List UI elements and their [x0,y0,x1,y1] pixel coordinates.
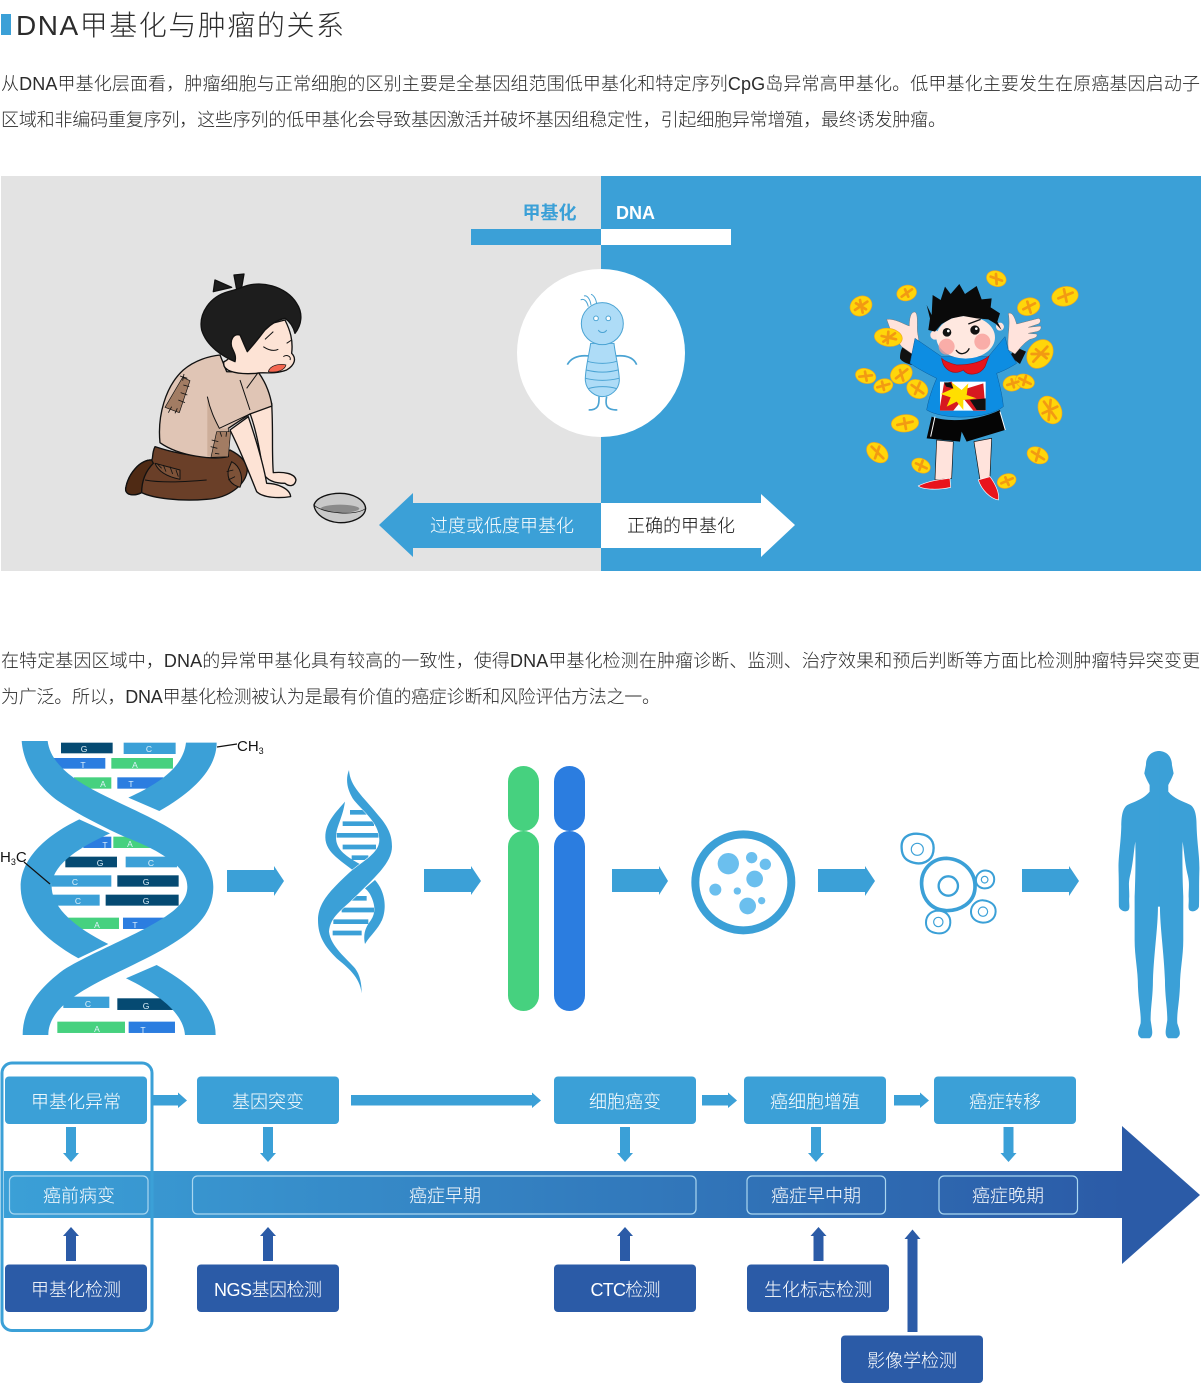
box: methylation abnormality [5,1076,147,1124]
base pairs [52,743,179,1033]
base letters: C [85,999,91,1009]
illustration: sad beggar boy [126,274,301,500]
CH3 label [217,738,264,756]
arrow: cells to human body [1022,866,1079,896]
label: DNA: DNA [616,203,655,223]
base letters: T [140,1025,146,1035]
box: cancer cell proliferation [744,1076,886,1124]
arrow: abnormal methylation [379,493,601,557]
box: metastasis [934,1076,1076,1124]
gray half background [1,176,601,571]
base letters: A [132,760,138,770]
arrow: horizontal 2 [351,1092,541,1108]
box: imaging detection: 影像学检测 [867,1351,957,1371]
blue shirt [910,337,1017,417]
stage: late cancer: 癌症晚期 [972,1186,1044,1206]
base letters: T [102,840,108,850]
stage: early to middle cancer [747,1176,886,1214]
H3C label: C [16,849,27,866]
H3C label [0,849,50,884]
intro paragraph: 从DNA甲基化层面看，肿瘤细胞与正常细胞的区别主要是全基因组范围低甲基化和特定序列CpG岛异常高甲基化。低甲基化主要发生在原癌基因启动子 [1,74,1200,94]
base letters: A [100,779,106,789]
stage: early cancer [192,1176,696,1214]
box: methylation abnormality: 甲基化异常 [31,1092,121,1112]
base letters: A [94,1024,100,1034]
arrow: horizontal 1 [153,1092,187,1108]
arrow: chromosome to cell [612,866,668,895]
second paragraph: 在特定基因区域中，DNA的异常甲基化具有较高的一致性，使得DNA甲基化检测在肿瘤诊断、监测、治疗效果和预后判断等方面比检测肿瘤特异突变更 [1,651,1200,671]
stage: precancerous lesion [10,1176,148,1214]
coins behind the boy [846,268,1080,491]
illustration: begging bowl [314,493,366,523]
highlight outline: first column [2,1063,152,1330]
base letters: C [75,896,81,906]
arrow: up 1 [63,1227,79,1261]
shoes [918,477,999,500]
cuffs [900,345,1026,365]
panel: methylation comparison [1,176,1201,571]
arrow: helix to chromosome [424,866,481,895]
spiky hair [927,284,1002,332]
intro paragraph: 区域和非编码重复序列，这些序列的低甲基化会导致基因激活并破坏基因组稳定性，引起细胞异常增殖，最终诱发肿瘤。 [1,110,946,130]
box: methylation detection [5,1264,147,1312]
stage: late cancer [939,1176,1078,1214]
illustration: happy boy with coins [846,268,1080,500]
box: methylation detection: 甲基化检测 [31,1280,121,1300]
CH3 label: CH [237,738,259,755]
arrow: down 1 [63,1127,79,1162]
box: metastasis: 癌症转移 [969,1092,1041,1112]
bar: blue and white [471,229,731,245]
base letters: G [81,744,87,754]
base letters: C [148,858,154,868]
icon: mutated cell in circle [695,834,791,930]
arrow: down 2 [260,1127,276,1162]
box: imaging detection [841,1336,983,1383]
base letters: G [143,877,149,887]
illustration: methylated DNA double helix [0,738,264,1035]
box: biomarker detection: 生化标志检测 [764,1280,872,1300]
base letters: T [128,779,134,789]
base letters: C [72,877,78,887]
blue half background [601,176,1201,571]
shorts [927,410,1005,442]
icon: small DNA helix [318,770,392,993]
H3C label: H [0,849,11,866]
ears and face [930,330,940,340]
shirt graphic [940,382,986,411]
arrow: up 4 [810,1227,826,1261]
box: NGS gene detection: NGS基因检测 [214,1280,322,1300]
arrow: cell to cell cluster [818,866,875,896]
CH3 label: 3 [259,746,264,756]
hands [887,312,1041,356]
base letters: C [146,744,152,754]
arrow: up 5 [904,1230,920,1332]
H3C label: 3 [11,857,16,867]
stage: early to middle cancer: 癌症早中期 [771,1186,861,1206]
arrow: down 5 [1000,1127,1016,1162]
arrow: horizontal 3 [702,1092,737,1108]
base letters: G [143,1001,149,1011]
base letters: G [97,858,103,868]
icon: DNA creature [567,294,637,410]
box: biomarker detection [747,1264,889,1312]
arrow: horizontal 4 [894,1092,929,1108]
icon: proliferating cancer cells [902,834,996,933]
coin marks [855,274,1073,485]
intro paragraph [1,74,1200,130]
arrow label: correct: 正确的甲基化 [627,516,735,536]
second paragraph: 为广泛。所以，DNA甲基化检测被认为是最有价值的癌症诊断和风险评估方法之一。 [1,687,660,707]
base letters: A [94,920,100,930]
base letters: T [132,920,138,930]
flow diagram [2,1063,1200,1383]
collar [942,356,989,374]
title: DNA甲基化与肿瘤的关系 [16,10,344,41]
arrow: up 3 [617,1227,633,1261]
base letters [72,744,154,1035]
arrow: correct methylation [601,494,795,557]
legs [935,438,992,480]
coin on the hand [873,326,903,348]
second paragraph [1,651,1200,707]
box: NGS gene detection [197,1264,339,1312]
arrow: down 4 [808,1127,824,1162]
box: cell carcinogenesis: 细胞癌变 [589,1092,661,1112]
box: CTC detection [554,1264,696,1312]
arrow: DNA to helix [227,866,284,896]
box: gene mutation [197,1076,339,1124]
big gradient timeline arrow [4,1126,1200,1264]
stage: early cancer: 癌症早期 [409,1186,481,1206]
helix strands [21,741,217,1035]
box: cancer cell proliferation: 癌细胞增殖 [770,1092,860,1112]
base letters: A [127,839,133,849]
label: methylation: 甲基化 [522,202,576,223]
arrow: up 2 [260,1227,276,1261]
stage: precancerous lesion: 癌前病变 [43,1186,115,1206]
base letters: T [80,760,86,770]
box: cell carcinogenesis [554,1076,696,1124]
arrow: down 3 [617,1127,633,1162]
box: CTC detection: CTC检测 [590,1280,660,1300]
icon: chromosome pair [508,766,585,1011]
box: gene mutation: 基因突变 [232,1092,304,1112]
arrow label: abnormal: 过度或低度甲基化 [430,516,574,536]
base letters: G [143,896,149,906]
white circle [517,269,685,437]
icon: human body silhouette [1119,751,1199,1038]
